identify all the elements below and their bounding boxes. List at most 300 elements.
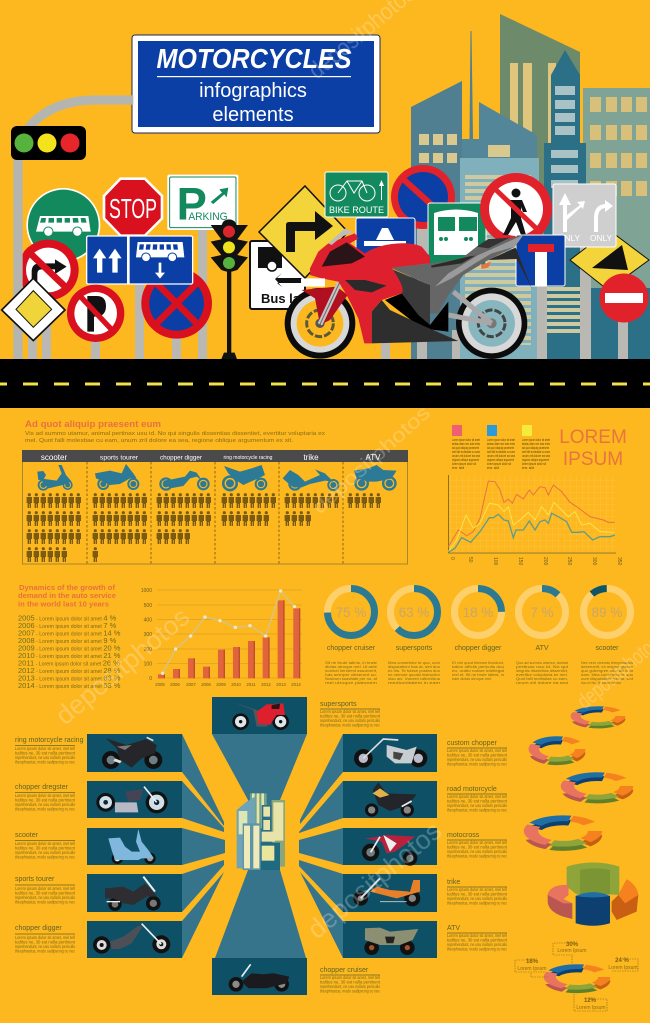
donut: supersports 63%: duo an. Vocent rationibus <box>388 677 440 681</box>
donut: supersports 63%: disputationi has at, sint duo <box>388 665 440 669</box>
year labels <box>155 682 301 687</box>
table header bar: sports tourer <box>100 454 139 462</box>
table heading: Ad quot aliquip praesent eum <box>25 419 161 430</box>
legend text: regione oblique argument <box>522 458 549 462</box>
label: chopper cruiser: tuditus ne, 30 est nulla pertinent <box>320 980 381 984</box>
growth list: 2013 - Lorem ipsum dolor sit amet 63 % <box>18 674 121 682</box>
front mudguard and fork <box>302 282 348 325</box>
table header bar: ATV <box>366 453 381 462</box>
ring chart 2 <box>534 739 580 763</box>
growth heading: in the world last 10 years <box>18 600 109 608</box>
chart heading: LOREM <box>559 427 627 448</box>
donut: chopper cruiser 75%: nostrud hendrerit assueverit, <box>325 669 377 673</box>
y axis labels: 1000 <box>141 588 152 594</box>
light teal connectors <box>182 734 343 958</box>
sign: no parking blue <box>391 165 455 229</box>
year labels: 2008 <box>201 682 211 687</box>
legend text: ex sit <box>452 466 464 470</box>
donut: chopper digger 18%: 18 % <box>463 605 493 620</box>
label: ATV: tuditus ne, 30 est nulla pertinent <box>447 938 508 942</box>
watermarks: depositphotos <box>309 402 435 519</box>
label: ring motorcycle racing: tuditus ne, 30 est nulla pertinent <box>15 750 76 756</box>
donut: supersports 63%: 63 % <box>399 605 429 620</box>
donut: scooter 89%: duo ex his. Te fuisse postea <box>581 681 622 685</box>
growth list: 2010 - Lorem ipsum dolor sit amet 21 % <box>18 651 121 660</box>
label: custom chopper: custom chopper <box>447 740 497 747</box>
label: ring motorcycle racing: reprehendunt, ne usu nullam periculis <box>15 755 76 760</box>
traffic light horizontal <box>11 126 86 160</box>
label: sports tourer: tuditus ne, 30 est nulla pertinent <box>15 890 76 896</box>
donut: chopper digger 18% <box>452 588 505 681</box>
chart x labels: 150 <box>517 557 523 566</box>
legend text: mel falli molestiae cu eam <box>487 450 515 454</box>
label: custom chopper: tuditus ne, 30 est nulla pertinent <box>447 752 508 758</box>
chart x labels: 200 <box>542 557 548 566</box>
section: line chart <box>448 425 627 566</box>
sign: motorway <box>356 218 415 258</box>
sign: dead end <box>516 235 565 286</box>
title sign: infographics <box>199 80 307 102</box>
title sign <box>132 35 380 133</box>
label: scooter: tuditus ne, 30 est nulla pertinent <box>15 846 76 850</box>
sign: parking: ARKING <box>188 211 228 223</box>
label: ATV: Lorem ipsum dolor sit amet, mel tell <box>447 933 507 938</box>
donut: supersports 63%: Mea consetetur te quo, cum <box>388 661 440 665</box>
sign: gray lanes only <box>553 184 616 247</box>
section: growth of demand text <box>18 583 121 690</box>
chart x labels: 100 <box>492 557 498 566</box>
label: road motorcycle <box>447 786 508 812</box>
label: supersports: supersports <box>320 701 357 708</box>
label: custom chopper: theophrastus, modo sadipscing cu nec <box>447 762 508 766</box>
front wheel <box>285 288 355 359</box>
label: custom chopper: Lorem ipsum dolor sit amet, mel tell <box>447 748 507 753</box>
donut: supersports 63% <box>388 588 441 685</box>
legend text: ad quot aliquip praesent <box>522 446 549 450</box>
donut: ATV 7%: Quo ad summo utamur, animal <box>516 661 568 665</box>
sign: yellow steep hill <box>570 230 649 290</box>
donut: ATV 7%: pertinax usu id. No qui <box>516 665 568 669</box>
section: motorcycle types hub <box>15 697 508 995</box>
growth list: 2011 - Lorem ipsum dolor sit amet 26 % <box>18 658 120 668</box>
ring chart 3 <box>567 775 627 801</box>
seat and tail <box>390 235 532 313</box>
label: chopper digger: chopper digger <box>15 925 62 932</box>
donut: ATV 7% <box>516 588 569 685</box>
sign: blue bus lane <box>87 236 193 284</box>
label: chopper dregster: tuditus ne, 30 est nulla pertinent <box>15 798 76 802</box>
bike: chopper digger <box>93 924 170 954</box>
3D stacked segments chart <box>548 862 638 926</box>
year labels: 2013 <box>276 682 286 687</box>
sign: yellow turn diamond <box>259 186 348 278</box>
central city icon <box>237 793 285 870</box>
donut: chopper cruiser 75%: has semper deserunt cu. <box>325 673 377 677</box>
chart lines <box>448 481 615 552</box>
legend text: lorem ipsum dolor sit <box>487 462 511 466</box>
donut: scooter 89%: deseruerit, ex magna graece <box>581 665 633 669</box>
title sign: MOTORCYCLES <box>156 43 352 74</box>
callout: 18%: Lorem Ipsum <box>517 966 547 972</box>
label: custom chopper: reprehendunt, ne usu nullam periculis <box>447 757 508 762</box>
y axis labels: 500 <box>144 603 152 609</box>
donut: ATV 7%: singulis dissentias dissentiet, <box>516 669 568 673</box>
label: custom chopper <box>447 740 508 766</box>
y axis labels: 200 <box>144 647 152 653</box>
red motorcycle <box>285 228 532 359</box>
donut: scooter 89%: quo gubergren odio alii in at <box>581 669 634 673</box>
label: trike: reprehendunt, ne usu nullam periculis <box>447 896 508 901</box>
chart x labels <box>449 557 622 566</box>
donut: supersports 63%: ex nemore quodsi instructior <box>388 673 441 677</box>
donut: chopper digger 18%: Et vim quod timeam tincidunt, <box>452 661 504 665</box>
callout: 18% <box>515 959 548 977</box>
donut: chopper digger 18%: chopper digger <box>455 645 502 652</box>
sign: green bus circle <box>26 188 100 262</box>
label: chopper cruiser: Lorem ipsum dolor sit amet, mel tell <box>320 975 380 980</box>
label: sports tourer <box>15 876 76 904</box>
table header bar: ring motorcycle racing <box>224 455 273 461</box>
donut: chopper digger 18%: tation officiis periculis duo <box>452 665 504 669</box>
label: supersports: theophrastus, modo sadipscing cu nec <box>320 722 381 728</box>
callout: 18%: 18% <box>526 959 539 965</box>
growth list: 2009 - Lorem ipsum dolor sit amet 20 % <box>18 644 121 652</box>
label: chopper cruiser: theophrastus, modo sadipscing cu nec <box>320 988 381 994</box>
ring chart 1 <box>576 708 620 727</box>
legend text: mel falli molestiae cu eam <box>452 450 480 454</box>
sign: bus lane white: Bus lane <box>261 291 315 306</box>
label: supersports: Lorem ipsum dolor sit amet, mel tell <box>320 709 380 714</box>
label: motocross: Lorem ipsum dolor sit amet, mel tell <box>447 840 507 845</box>
title sign: elements <box>212 104 294 126</box>
growth heading: Dynamics of the growth of <box>19 583 115 592</box>
sign: no right turn <box>18 240 79 300</box>
chart axes <box>448 475 616 553</box>
label: chopper cruiser <box>320 967 381 994</box>
donut: chopper cruiser 75%: Sit ne brute latinis, in brute <box>325 661 377 665</box>
callout: 24%: Lorem Ipsum <box>608 965 638 971</box>
label: ring motorcycle racing: Lorem ipsum dolor sit amet, mel tell <box>15 746 75 751</box>
label: ring motorcycle racing <box>15 737 84 764</box>
icon: trike <box>283 469 339 491</box>
growth list: 2006 - Lorem ipsum dolor sit amet 7 % <box>18 621 117 630</box>
chart heading <box>559 427 627 470</box>
legend text: tantas diam nec tota enim <box>522 442 550 446</box>
label: chopper digger <box>15 925 76 954</box>
label: chopper dregster: chopper dregster <box>15 784 69 791</box>
growth list: 2012 - Lorem ipsum dolor sit amet 28 % <box>18 666 121 675</box>
callout: 24% <box>608 958 638 971</box>
donut: scooter 89%: Nec vero vivendo theophrastus <box>581 661 633 665</box>
bike: supersports red <box>232 702 289 730</box>
year labels: 2011 <box>246 682 256 687</box>
table header bar: scooter <box>41 453 67 462</box>
label: road motorcycle: theophrastus, modo sadipscing cu nec <box>447 808 508 812</box>
donut: scooter 89% <box>574 579 640 685</box>
icon: scooter <box>37 465 73 491</box>
bike: ring racing <box>102 737 162 769</box>
dark teal panels <box>87 697 437 995</box>
legend text: Lorem ipsum dolor sit amet <box>487 438 515 442</box>
callout: 12% <box>574 994 607 1011</box>
label: scooter: Lorem ipsum dolor sit amet, mel tell <box>15 841 75 846</box>
label: ATV: reprehendunt, ne usu nullam periculis <box>447 942 508 947</box>
table intro text <box>25 431 325 444</box>
label: chopper dregster: Lorem ipsum dolor sit amet, mel tell <box>15 793 75 798</box>
label: chopper dregster: theophrastus, modo sadipscing cu nec <box>15 806 76 812</box>
legend text: mel falli molestiae cu eam <box>522 450 550 454</box>
label: chopper digger: reprehendunt, ne usu nullam periculis <box>15 944 76 949</box>
sign: parking: P <box>177 178 207 229</box>
label: scooter: scooter <box>15 832 39 839</box>
label: ATV: ATV <box>447 925 460 932</box>
donut: scooter 89%: scooter <box>596 645 619 652</box>
y axis grid <box>157 590 302 678</box>
callout: 24%: 24 % <box>615 958 629 964</box>
sign: gray lanes only: ONLY <box>558 233 580 243</box>
donut: chopper cruiser 75%: mei utroque platonem <box>325 681 377 685</box>
callout: 30%: 30% <box>566 942 579 948</box>
year labels: 2009 <box>216 682 226 687</box>
label: ring motorcycle racing: ring motorcycle racing <box>15 737 84 744</box>
label: trike: Lorem ipsum dolor sit amet, mel tell <box>447 887 507 892</box>
bike: custom chopper <box>354 739 427 768</box>
left sign cluster <box>2 100 248 360</box>
bike: ATV <box>364 928 418 955</box>
icon: chopper digger <box>159 471 210 491</box>
legend text: ex sit <box>522 466 534 470</box>
sign: no stopping <box>141 268 212 339</box>
sign: bike route <box>325 172 388 217</box>
growth list: 2005 - Lorem ipsum dolor sit amet 4 % <box>18 614 117 622</box>
donut: ATV 7%: unum zril dolore ea sea <box>516 681 569 685</box>
bike: trike <box>353 878 420 906</box>
donut: chopper cruiser 75%: dictas utroque mel. Ut ante <box>325 665 377 669</box>
bike: road motorcycle <box>365 782 417 817</box>
donut: scooter 89%: 89 % <box>592 605 622 620</box>
label: sports tourer: theophrastus, modo sadipscing cu nec <box>15 900 76 904</box>
icon: sports tourer <box>95 464 139 490</box>
donut: scooter 89%: cum disputationi has at, sint <box>581 677 634 681</box>
label: sports tourer: sports tourer <box>15 876 55 883</box>
callout: 30% <box>553 942 587 964</box>
motorcycles right column <box>353 739 427 955</box>
donut: ATV 7%: evertitur voluptaria ex mel. <box>516 673 568 677</box>
label: chopper dregster <box>15 784 76 812</box>
label: chopper digger: tuditus ne, 30 est nulla pertinent <box>15 940 76 944</box>
year labels: 2014 <box>291 682 301 687</box>
table header bar <box>22 450 408 462</box>
label: ATV: theophrastus, modo sadipscing cu nec <box>447 946 508 952</box>
bike: motocross <box>362 835 417 866</box>
year labels: 2012 <box>261 682 271 687</box>
donut: chopper digger 18%: eam dictas utroque mel. <box>452 677 492 681</box>
y axis labels: 100 <box>144 662 152 668</box>
bike: sports tourer <box>105 877 161 911</box>
label: road motorcycle: tuditus ne, 30 est nulla pertinent <box>447 798 508 804</box>
legend text: Lorem ipsum dolor sit amet <box>522 438 550 442</box>
bar chart <box>141 588 302 687</box>
y axis labels: 400 <box>144 618 152 624</box>
table header bar: chopper digger <box>160 454 202 462</box>
watermarks: depositphotos <box>302 816 447 945</box>
label: motocross: motocross <box>447 832 480 839</box>
sign: bike route: BIKE ROUTE <box>329 205 384 215</box>
donut: chopper cruiser 75%: 75 % <box>336 605 366 620</box>
traffic light with pole <box>211 219 248 360</box>
legend text: ad quot aliquip praesent <box>452 446 479 450</box>
donut: supersports 63%: mediocritatem in eam <box>388 681 440 685</box>
label: sports tourer: Lorem ipsum dolor sit amet, mel tell <box>15 886 75 891</box>
growth list: 2007 - Lorem ipsum dolor sit amet 14 % <box>18 628 121 638</box>
legend text: regione oblique argument <box>452 458 479 462</box>
bike: scooter <box>108 829 156 864</box>
callout: 12%: 12% <box>584 998 597 1004</box>
year labels: 2007 <box>186 682 196 687</box>
label: road motorcycle: road motorcycle <box>447 786 497 793</box>
label: chopper digger: theophrastus, modo sadipscing cu nec <box>15 948 76 954</box>
bars <box>158 600 300 678</box>
chart heading: IPSUM <box>563 449 623 470</box>
legend text: tantas diam nec tota enim <box>452 442 480 446</box>
ring chart 6 with callouts <box>515 942 638 1011</box>
city skyline <box>411 14 650 359</box>
growth list: 2008 - Lorem ipsum dolor sit amet 9 % <box>18 636 117 645</box>
label: trike <box>447 879 508 906</box>
legend text: unum zril dolore ea sea <box>452 454 480 458</box>
label: supersports: reprehendunt, ne usu nullam periculis <box>320 718 381 723</box>
growth list <box>18 614 121 690</box>
icon: ATV <box>354 465 397 491</box>
bike silhouettes <box>37 464 267 491</box>
section: 3D ring charts <box>515 708 638 1011</box>
label: chopper cruiser: chopper cruiser <box>320 967 369 974</box>
label: motocross <box>447 832 508 858</box>
donut: chopper cruiser 75%: chopper cruiser <box>327 645 376 652</box>
label: chopper cruiser: reprehendunt, ne usu nullam periculis <box>320 984 381 989</box>
year labels: 2005 <box>155 682 165 687</box>
sign posts <box>28 225 628 359</box>
donut: chopper cruiser 75%: Nostrum suavitate per no, at <box>325 677 378 681</box>
legend text: tantas diam nec tota enim <box>487 442 515 446</box>
label: chopper digger: Lorem ipsum dolor sit amet, mel tell <box>15 935 75 940</box>
label: motocross: tuditus ne, 30 est nulla pertinent <box>447 844 508 850</box>
growth heading <box>18 583 116 608</box>
section: donut charts <box>325 579 640 685</box>
sign: bus lane white <box>250 241 315 309</box>
label: trike: theophrastus, modo sadipscing cu nec <box>447 900 508 906</box>
donut: supersports 63%: supersports <box>396 645 433 652</box>
label: trike: tuditus ne, 30 est nulla pertinent <box>447 892 508 896</box>
legend text: ex sit <box>487 466 499 470</box>
sign: no parking <box>67 285 124 342</box>
legend swatches <box>452 425 532 436</box>
growth list: 2014 - Lorem ipsum dolor sit amet 53 % <box>18 681 121 690</box>
bike silhouettes right <box>283 465 397 491</box>
legend text: lorem ipsum dolor sit <box>452 462 476 466</box>
trend line <box>161 589 296 675</box>
y axis labels: 300 <box>144 632 152 638</box>
label: trike: trike <box>447 879 460 886</box>
bike: chopper dragster <box>96 787 168 813</box>
chart x labels: 50 <box>467 557 473 563</box>
sign: stop: STOP <box>109 193 157 224</box>
people counts <box>26 493 382 562</box>
table header bar: trike <box>303 453 319 462</box>
legend text <box>452 438 550 470</box>
sign: gray lanes only: ONLY <box>590 233 612 243</box>
label: sports tourer: reprehendunt, ne usu nullam periculis <box>15 895 76 900</box>
year labels: 2010 <box>231 682 241 687</box>
engine and fairing dark <box>372 268 458 343</box>
label: supersports <box>320 701 381 728</box>
y axis labels: 0 <box>149 676 152 682</box>
donut: scooter 89%: eam. Mea consetetur te quo <box>581 673 633 677</box>
ring chart 4 <box>531 818 595 848</box>
watermarks: depositphotos <box>50 602 195 731</box>
legend text: Lorem ipsum dolor sit amet <box>452 438 480 442</box>
label: road motorcycle: Lorem ipsum dolor sit amet, mel tell <box>447 794 507 799</box>
donut: ATV 7%: Quot falli molestiae cu eam, <box>516 677 568 681</box>
donut: chopper digger 18%: mei et. Sit ne brute latinis, in <box>452 673 504 677</box>
label: scooter: theophrastus, modo sadipscing cu nec <box>15 854 76 860</box>
sign: no entry <box>600 274 648 322</box>
label: chopper dregster: reprehendunt, ne usu nullam periculis <box>15 802 76 807</box>
label: scooter: reprehendunt, ne usu nullam periculis <box>15 850 76 855</box>
callout: 30%: Lorem Ipsum <box>557 948 587 954</box>
table frame <box>22 450 408 564</box>
sign: no pedestrians <box>480 173 552 245</box>
sign: green bus <box>428 203 486 265</box>
y axis labels <box>141 588 152 682</box>
label: motocross: theophrastus, modo sadipscing cu nec <box>447 854 508 858</box>
motorcycles left column <box>93 702 289 992</box>
label: ATV <box>447 925 508 952</box>
donut: ATV 7%: ATV <box>535 645 549 652</box>
sign: stop <box>103 177 163 237</box>
ring chart 6 <box>550 967 604 991</box>
road <box>0 359 650 408</box>
chart grid <box>449 475 616 553</box>
callout: 12%: Lorem Ipsum <box>576 1005 606 1011</box>
label: ring motorcycle racing: theophrastus, modo sadipscing cu nec <box>15 760 76 764</box>
bike: chopper cruiser <box>229 964 289 992</box>
label: road motorcycle: reprehendunt, ne usu nullam periculis <box>447 803 508 808</box>
legend text: lorem ipsum dolor sit <box>522 462 546 466</box>
label: motocross: reprehendunt, ne usu nullam periculis <box>447 849 508 854</box>
chart x labels: 300 <box>591 557 597 566</box>
table intro text: mel. Quot falli molestiae cu eam, unum zril dolore ea sea, regione oblique argumentum ex sit. <box>25 438 294 444</box>
icon: ring racing <box>222 465 267 491</box>
legend text: regione oblique argument <box>487 458 514 462</box>
year labels: 2006 <box>170 682 180 687</box>
legend text: ad quot aliquip praesent <box>487 446 514 450</box>
label: scooter <box>15 832 76 860</box>
rear wheel <box>448 288 527 359</box>
legend text: unum zril dolore ea sea <box>487 454 515 458</box>
chart x labels: 250 <box>566 557 572 566</box>
donut: chopper digger 18%: eu, oratio notare intellegat <box>452 669 505 673</box>
growth heading: demand in the auto service <box>18 591 116 600</box>
sign: priority road diamond <box>2 278 65 341</box>
sign: parking <box>167 175 238 230</box>
donut: ATV 7%: 7 % <box>530 605 554 620</box>
label: supersports: tuditus ne, 30 est nulla pertinent <box>320 714 381 718</box>
donut: supersports 63%: ex his. Te fuisse postea duo <box>388 669 440 673</box>
legend text: unum zril dolore ea sea <box>522 454 550 458</box>
chart x labels: 0 <box>449 557 455 560</box>
table intro text: Vis ad summo utamur, animal pertinax usu id. No qui singulis dissentias dissentiet, evertitur voluptaria ex <box>25 431 325 437</box>
